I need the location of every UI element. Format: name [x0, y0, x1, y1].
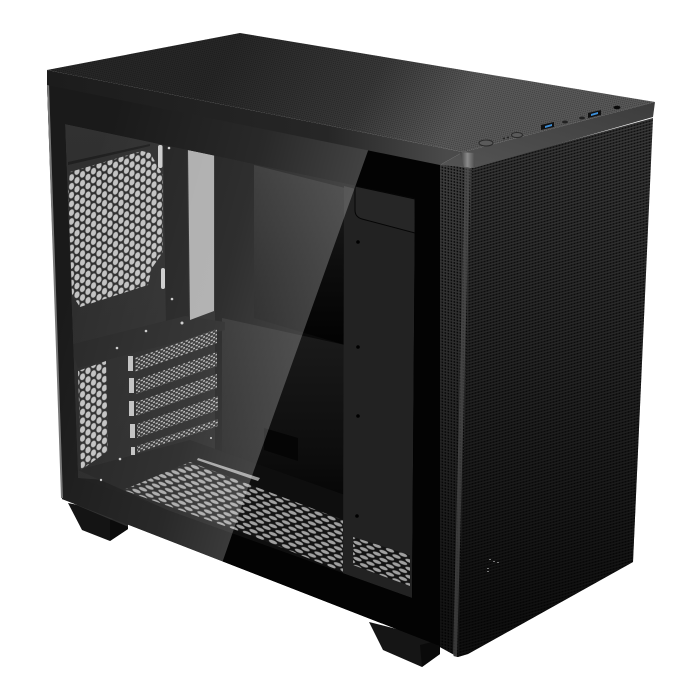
rear wall [65, 124, 215, 480]
vent: floor mesh [123, 458, 343, 572]
perforation: rear fan mesh [68, 151, 163, 307]
tray screw holes [355, 240, 360, 518]
panel: tempered glass side [47, 84, 440, 646]
vents: PCI expansion slots [128, 329, 218, 455]
glass frame mask [47, 84, 440, 646]
icon: reset and LEDs [503, 132, 522, 140]
main tray [215, 156, 240, 451]
glass left edge highlight [47, 84, 63, 498]
motherboard tray lit area [254, 165, 344, 240]
panel: right side mesh [454, 118, 653, 657]
icon: USB port right [588, 110, 601, 118]
rear panel upper line [68, 144, 150, 165]
icon: small right port [614, 106, 620, 109]
rear side light gap [188, 150, 214, 320]
foot: right [369, 622, 440, 667]
drive bracket [355, 186, 415, 233]
rear side divider [163, 140, 189, 326]
foot: left [68, 503, 128, 541]
cable cover [343, 186, 415, 598]
slot brackets [128, 356, 135, 455]
icon: USB port left [541, 122, 554, 130]
panel: front corner mesh strip [438, 164, 472, 657]
lower tray [222, 318, 344, 406]
cable pass-through shape [264, 428, 298, 461]
floor [102, 480, 343, 573]
panel: interior seen through window [65, 124, 415, 598]
rear wall screws and slots [100, 145, 212, 481]
panel: top mesh [47, 33, 655, 152]
side panel tiny markings [487, 559, 499, 572]
icon: audio jacks [562, 116, 586, 124]
vent: PSU shroud mesh [353, 537, 410, 586]
icon: power button [479, 140, 493, 146]
perforation: lower rear vent [78, 361, 108, 470]
bezel: top right edge with IO panel [440, 102, 655, 168]
glass reflection [47, 84, 369, 566]
bezel: top front edge [47, 70, 463, 165]
illustration: black PC case with tempered glass side [47, 33, 655, 667]
rear cross rail [215, 321, 222, 332]
